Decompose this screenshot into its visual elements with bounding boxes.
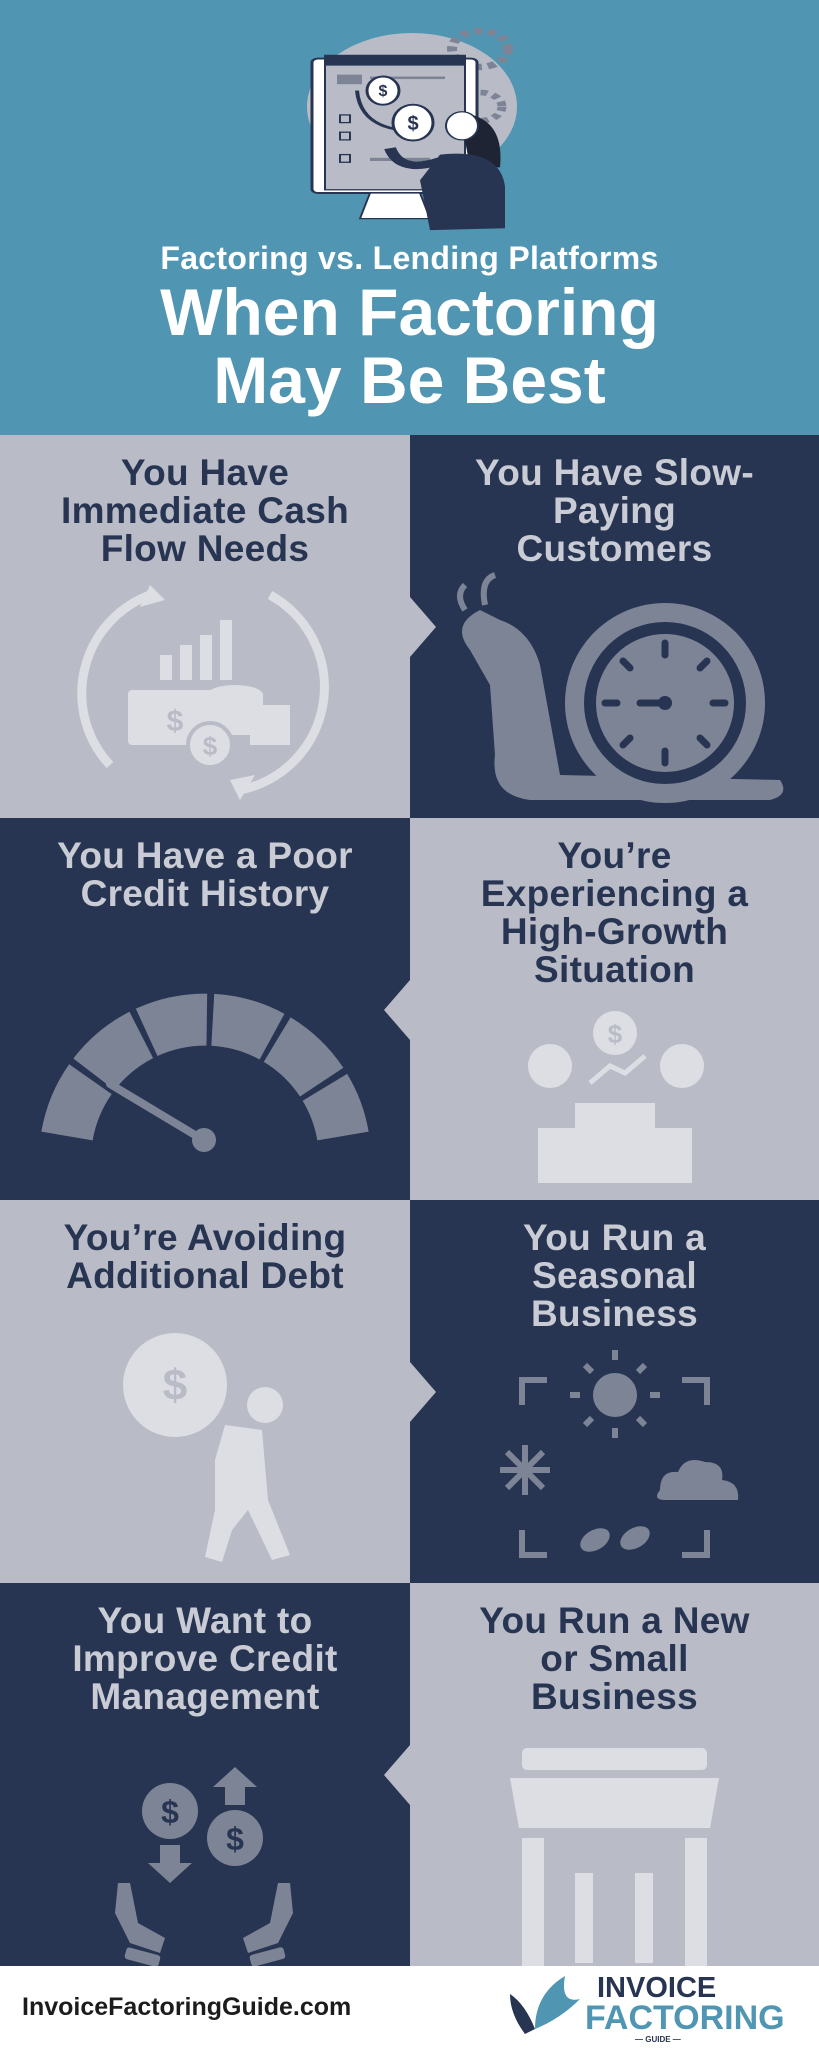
title: When Factoring xyxy=(160,275,659,349)
icon: growth: $ xyxy=(608,1019,623,1049)
logo xyxy=(510,1972,785,2044)
panel: high growth xyxy=(410,818,819,1201)
panel: credit management xyxy=(0,1583,410,1966)
heading: You Run a xyxy=(523,1217,706,1258)
heading: Paying xyxy=(553,490,676,531)
logo: FACTORING xyxy=(585,1999,785,2037)
heading: Additional Debt xyxy=(66,1255,344,1296)
title xyxy=(160,275,659,417)
panel: immediate cash flow xyxy=(0,435,410,818)
heading: Experiencing a xyxy=(481,873,748,914)
heading xyxy=(475,452,754,569)
footer xyxy=(0,1966,819,2048)
icon: hands and coins: $ xyxy=(161,1794,179,1830)
arrow: row2 xyxy=(384,980,410,1040)
icon: cash cycle: $ xyxy=(203,731,218,761)
title: May Be Best xyxy=(213,343,606,417)
header xyxy=(0,0,819,435)
heading: Seasonal xyxy=(532,1255,697,1296)
heading: Management xyxy=(90,1676,320,1717)
heading: or Small xyxy=(540,1638,689,1679)
panel: avoiding debt xyxy=(0,1200,410,1583)
panel: poor credit xyxy=(0,818,410,1201)
illustration: person at monitor: $ xyxy=(379,83,388,100)
heading: Business xyxy=(531,1676,698,1717)
heading: Flow Needs xyxy=(101,528,309,569)
heading xyxy=(61,452,349,569)
heading: Credit History xyxy=(81,873,329,914)
illustration: person at monitor xyxy=(307,28,517,230)
arrow: row1 xyxy=(410,597,436,657)
heading xyxy=(57,835,353,914)
icon: cash cycle: $ xyxy=(167,705,184,738)
icon: person carrying money bag xyxy=(123,1333,290,1562)
heading: Business xyxy=(531,1293,698,1334)
icon: hands and coins: $ xyxy=(226,1821,244,1857)
heading xyxy=(481,835,748,990)
heading: Improve Credit xyxy=(72,1638,338,1679)
heading: You Run a New xyxy=(479,1600,750,1641)
illustration: person at monitor: $ xyxy=(407,113,419,135)
heading xyxy=(72,1600,338,1717)
footer url: InvoiceFactoringGuide.com xyxy=(22,1993,351,2021)
heading xyxy=(523,1217,706,1334)
heading: You Have xyxy=(121,452,289,493)
panel: seasonal xyxy=(410,1200,819,1583)
logo: INVOICE xyxy=(597,1972,716,2004)
heading: You’re xyxy=(557,835,672,876)
heading: Immediate Cash xyxy=(61,490,349,531)
icon: person carrying money bag: $ xyxy=(163,1361,187,1410)
icon: gauge xyxy=(41,994,368,1152)
heading xyxy=(64,1217,346,1296)
panel: new or small business xyxy=(410,1583,819,1966)
panel: slow paying xyxy=(410,435,819,818)
icon: growth xyxy=(528,1011,704,1183)
heading: You’re Avoiding xyxy=(64,1217,346,1258)
arrow: row4 xyxy=(384,1745,410,1805)
logo: — GUIDE — xyxy=(635,2035,681,2044)
icon: snail clock xyxy=(456,572,784,803)
subtitle: Factoring vs. Lending Platforms xyxy=(160,240,659,276)
icon: hands and coins xyxy=(115,1767,293,1966)
heading: You Have Slow- xyxy=(475,452,754,493)
heading xyxy=(479,1600,750,1717)
heading: You Want to xyxy=(98,1600,312,1641)
icon: cash cycle xyxy=(77,585,329,800)
arrow: row3 xyxy=(410,1362,436,1422)
icon: storefront xyxy=(510,1748,719,1966)
heading: You Have a Poor xyxy=(57,835,353,876)
heading: Situation xyxy=(534,949,695,990)
heading: High-Growth xyxy=(501,911,728,952)
icon: seasons xyxy=(500,1350,738,1558)
heading: Customers xyxy=(516,528,712,569)
